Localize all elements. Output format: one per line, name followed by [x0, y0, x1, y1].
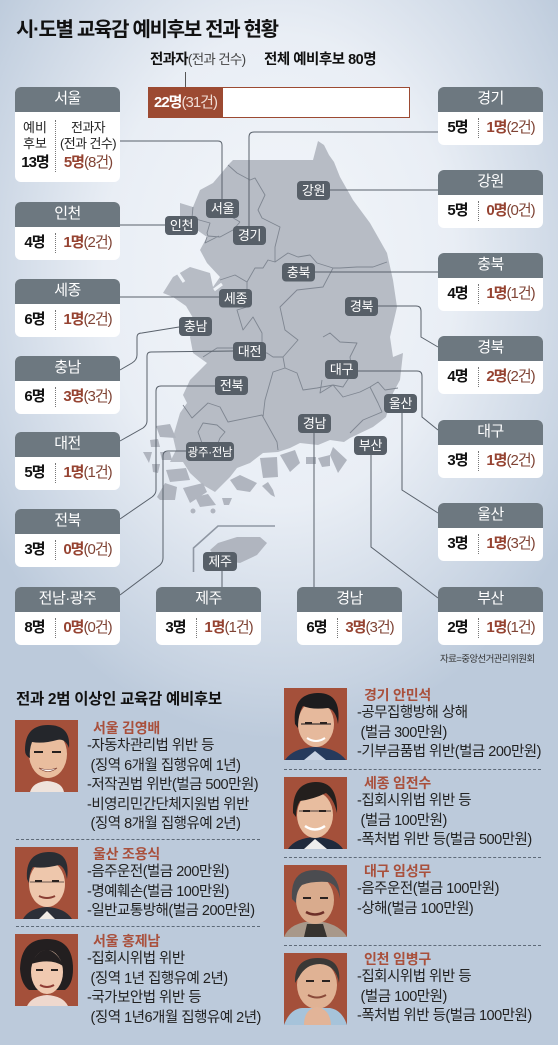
card: Gyeonggi: 경기 [477, 90, 504, 107]
card: Chungbuk [438, 253, 543, 311]
offences: -음주운전(벌금 200만원) [87, 864, 229, 880]
card: Daegu: 1명(2건) [486, 452, 535, 469]
offences: (징역 1년6개월 집행유예 2년) [91, 1010, 261, 1026]
card: Ulsan: 울산 [477, 506, 504, 523]
bar tick [184, 72, 186, 87]
card: Chungnam: 6명 [24, 388, 45, 405]
name: 서울 홍제남 [93, 933, 160, 949]
source note: 자료=중앙선거관리위원회 [440, 654, 534, 665]
name: 인천 임병구 [364, 951, 431, 967]
label: Chungnam: 충남 [184, 319, 207, 334]
candidate: Incheon Lim Byeong-gu [357, 951, 532, 1024]
portrait: Lim Jeon-su [284, 777, 347, 849]
section heading: candidates with two or more convictions: 전과 2범 이상인 교육감 예비후보 [16, 691, 222, 708]
offences: (징역 6개월 집행유예 1년) [91, 758, 240, 774]
name: 서울 김영배 [93, 720, 160, 736]
card: Sejong: 6명 [24, 311, 45, 328]
card: Daejeon: 5명 [24, 464, 45, 481]
title: 시·도별 교육감 예비후보 전과 현황 [16, 19, 278, 41]
card: Chungnam: 충남 [54, 359, 81, 376]
label: Incheon: 인천 [170, 218, 193, 233]
offences [357, 968, 532, 1024]
offences: -일반교통방해(벌금 200만원) [87, 903, 255, 919]
card: Gyeongnam: 경남 [336, 590, 363, 607]
offences [357, 704, 541, 760]
label: Ulsan: 울산 [389, 396, 412, 411]
card: Jeju: 1명(1건) [204, 619, 253, 636]
card: Chungbuk: 충북 [477, 256, 504, 273]
offences: -공무집행방해 상해 [357, 705, 468, 721]
card: Chungnam: 3명(3건) [63, 388, 112, 405]
label: Gangwon [297, 181, 330, 200]
offences: -폭처법 위반 등(벌금 500만원) [357, 832, 532, 848]
label: Gyeongnam [298, 414, 331, 433]
card: Busan: 부산 [477, 590, 504, 607]
card: Gangwon: 강원 [477, 173, 504, 190]
card: Incheon: 1명(2건) [63, 234, 112, 251]
bar legend: convicted: 전과자(전과 건수) [150, 52, 245, 68]
name: 대구 임성무 [364, 863, 431, 879]
candidate: Ulsan Cho Yong-sik [87, 846, 255, 919]
card: Sejong: 세종 [54, 282, 81, 299]
card: Seoul: 예비 [23, 120, 47, 135]
card: Chungbuk: 4명 [447, 285, 468, 302]
offences: -비영리민간단체지원법 위반 [87, 796, 249, 812]
card: Jeonnam Gwangju: 0명(0건) [63, 619, 112, 636]
label: Seoul [206, 199, 239, 218]
bar legend: total: 전체 예비후보 80명 [264, 52, 376, 68]
card: Gyeonggi: 5명 [447, 119, 468, 136]
map: province boundaries [183, 165, 398, 450]
map: small rocks [190, 508, 216, 514]
label: Chungnam [179, 317, 212, 336]
offences: -폭처법 위반 등(벌금 100만원) [357, 1008, 532, 1024]
offences: (징역 1년 집행유예 2년) [91, 970, 228, 986]
card: Seoul: 후보 [23, 136, 47, 150]
candidate: Seoul Hong Je-nam [87, 933, 261, 1026]
label: Chungbuk [282, 263, 315, 282]
label: Jeju [203, 552, 237, 571]
label: Busan [354, 436, 387, 455]
label: Gyeongbuk [345, 297, 378, 316]
card: Daegu: 대구 [477, 423, 504, 440]
card: Gangwon [438, 170, 543, 228]
bar fill [148, 87, 223, 118]
offences [357, 880, 499, 916]
card: Incheon: 4명 [24, 234, 45, 251]
offences [87, 864, 255, 919]
card: Gyeongnam: 6명 [306, 619, 327, 636]
card: Daegu [438, 420, 543, 478]
name: 세종 임전수 [364, 775, 431, 791]
candidate: Seoul Kim Young-bae [87, 720, 258, 832]
offences: -기부금품법 위반(벌금 200만원) [357, 744, 541, 760]
card: Jeonnam Gwangju: 전남·광주 [39, 590, 96, 607]
card: Seoul: 서울 [54, 90, 81, 107]
offences: -국가보안법 위반 등 [87, 990, 201, 1006]
card: Jeju [156, 587, 261, 645]
offences [87, 738, 258, 832]
label: Daejeon [233, 342, 266, 361]
card: Incheon: 인천 [54, 205, 81, 222]
card: Daejeon [15, 432, 120, 490]
card: Seoul: 13명 [21, 154, 49, 171]
portrait: Lim Seong-mu [284, 865, 347, 937]
card: Gyeongbuk [438, 336, 543, 394]
portrait: Cho Yong-sik [15, 847, 78, 919]
card: Gyeonggi [438, 87, 543, 145]
label: Gyeongbuk: 경북 [350, 299, 373, 314]
label: Jeju: 제주 [208, 554, 232, 569]
bar fill: 22명(31건) [154, 94, 217, 111]
offences: -집회시위법 위반 등 [357, 969, 471, 985]
label: Busan: 부산 [359, 438, 382, 453]
offences: (벌금 100만원) [361, 812, 447, 828]
card: Chungbuk: 1명(1건) [486, 285, 535, 302]
portrait: Ahn Min-seok [284, 688, 347, 760]
offences: (벌금 100만원) [361, 988, 447, 1004]
card: Chungnam [15, 356, 120, 414]
label: Gangwon: 강원 [302, 183, 325, 198]
label: Jeonbuk [215, 376, 248, 395]
offences: -명예훼손(벌금 100만원) [87, 884, 229, 900]
bar chart: 22 of 80 candidates [148, 87, 410, 118]
card: Gyeongbuk: 2명(2건) [486, 368, 535, 385]
card: Jeonbuk: 3명 [24, 541, 45, 558]
map: coastal gaps [176, 251, 222, 317]
offences: -집회시위법 위반 등 [357, 793, 471, 809]
card: Jeonbuk: 0명(0건) [63, 541, 112, 558]
portrait: Hong Je-nam [15, 934, 78, 1006]
card: Gyeongnam [297, 587, 402, 645]
candidate: Gyeonggi Ahn Min-seok [357, 687, 541, 760]
map: Jeju inset frame [194, 526, 275, 572]
label: Sejong: 세종 [224, 291, 247, 306]
offences: (벌금 300만원) [361, 724, 447, 740]
card: Busan: 1명(1건) [486, 619, 535, 636]
name: 울산 조용식 [93, 846, 160, 862]
offences [357, 792, 532, 848]
candidate: Sejong Lim Jeon-su [357, 775, 532, 848]
card: Seoul: 전과자 [71, 120, 105, 135]
card: Jeonnam Gwangju [15, 587, 120, 645]
offences: -자동차관리법 위반 등 [87, 738, 214, 754]
portrait: Kim Young-bae [15, 720, 78, 792]
label: Daejeon: 대전 [238, 344, 261, 359]
card: Gangwon: 5명 [447, 202, 468, 219]
card: Jeju: 제주 [195, 590, 222, 607]
label: Jeonbuk: 전북 [220, 378, 243, 393]
label: Gyeonggi: 경기 [238, 228, 261, 243]
offences: -음주운전(벌금 100만원) [357, 881, 499, 897]
label: Incheon [165, 216, 198, 235]
card: Gyeonggi: 1명(2건) [486, 119, 535, 136]
card: Gyeongbuk: 경북 [477, 339, 504, 356]
label: Chungbuk: 충북 [287, 265, 310, 280]
card: Jeonnam Gwangju: 8명 [24, 619, 45, 636]
card: Ulsan: 3명 [447, 535, 468, 552]
card: Gyeongbuk: 4명 [447, 368, 468, 385]
label: Gwangju Jeonnam [186, 442, 234, 461]
label: Gyeongnam: 경남 [303, 416, 326, 431]
label: Daegu [325, 360, 358, 379]
card: Incheon [15, 202, 120, 260]
card: Seoul: (전과 건수) [60, 136, 116, 150]
card: Busan [438, 587, 543, 645]
map: Jeju island [210, 537, 267, 563]
label: Daegu: 대구 [330, 362, 353, 377]
name: 경기 안민석 [364, 687, 431, 703]
card: Jeonbuk: 전북 [54, 512, 81, 529]
label: Sejong [219, 289, 252, 308]
map: South Korea [143, 141, 403, 572]
offences: -집회시위법 위반 [87, 951, 185, 967]
card: Jeju: 3명 [165, 619, 186, 636]
offences: (징역 8개월 집행유예 2년) [91, 816, 240, 832]
portrait: Lim Byeong-gu [284, 953, 347, 1025]
card: Sejong [15, 279, 120, 337]
card: Sejong: 1명(2건) [63, 311, 112, 328]
label: Seoul: 서울 [211, 201, 234, 216]
card: Gangwon: 0명(0건) [486, 202, 535, 219]
card: Ulsan: 1명(3건) [486, 535, 535, 552]
leader lines [120, 132, 438, 598]
card: Busan: 2명 [447, 619, 468, 636]
label: Gwangju Jeonnam: 광주·전남 [188, 446, 233, 459]
candidate: Daegu Lim Seong-mu [357, 863, 499, 916]
map labels [165, 181, 417, 571]
card: Seoul [15, 87, 120, 182]
label: Ulsan [384, 394, 417, 413]
card: Daejeon: 대전 [54, 435, 81, 452]
card: Daegu: 3명 [447, 452, 468, 469]
card: Seoul: 5명(8건) [64, 154, 112, 171]
offences [87, 950, 261, 1026]
card: Jeonbuk [15, 509, 120, 567]
offences: -상해(벌금 100만원) [357, 900, 473, 916]
card: Ulsan [438, 503, 543, 561]
offences: -저작권법 위반(벌금 500만원) [87, 777, 258, 793]
card: Daejeon: 1명(1건) [63, 464, 112, 481]
label: Gyeonggi [233, 226, 266, 245]
map: islands [143, 424, 347, 507]
card: Gyeongnam: 3명(3건) [345, 619, 394, 636]
